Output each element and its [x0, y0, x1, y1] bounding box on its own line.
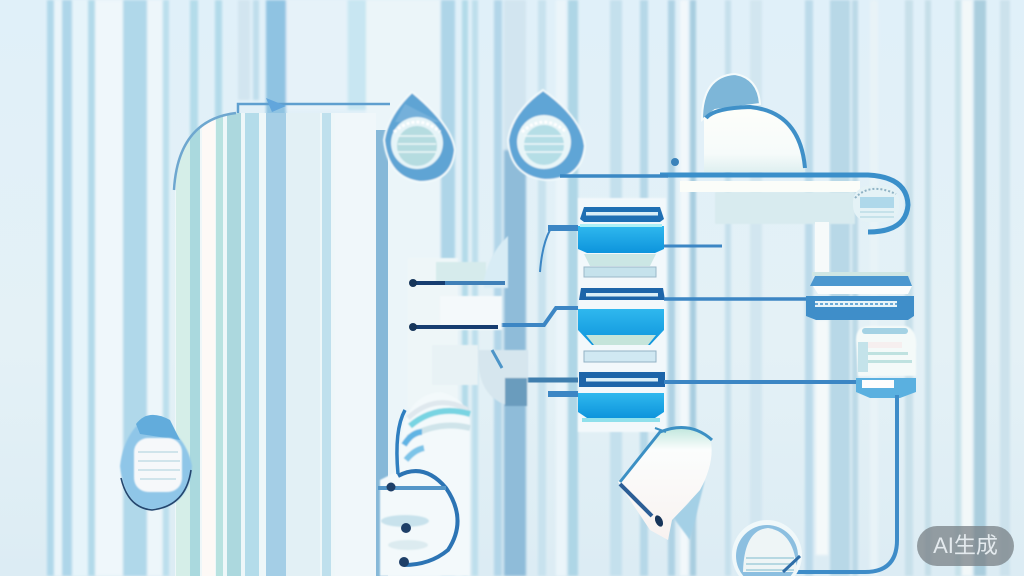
icon: top left drop circle: [384, 92, 455, 182]
badge: AI generated: AI生成: [933, 533, 998, 558]
block 3: [578, 372, 665, 422]
badge: AI generated: [917, 526, 1014, 566]
panel: left tall rounded panel: [174, 98, 390, 576]
icon: bottom left circle: [120, 415, 192, 510]
panel: center stacked blocks: [578, 198, 666, 432]
panel: right lower capsule: [856, 326, 916, 398]
connector: top right loop: [560, 158, 908, 277]
block 1: [578, 207, 664, 277]
panel: left-center label tabs: [408, 236, 528, 408]
icon: top center drop circle: [508, 90, 585, 180]
panel: right label bars: [806, 272, 914, 320]
icon: bottom right circle: [732, 520, 802, 576]
connectors: block lines: [498, 228, 860, 394]
panel: upper right arch: [702, 74, 805, 174]
connector: right lower line: [780, 395, 897, 572]
block 2: [578, 288, 665, 362]
panel: bottom center fan shape: [618, 427, 712, 540]
panel: bottom center curved shape: [378, 392, 470, 576]
